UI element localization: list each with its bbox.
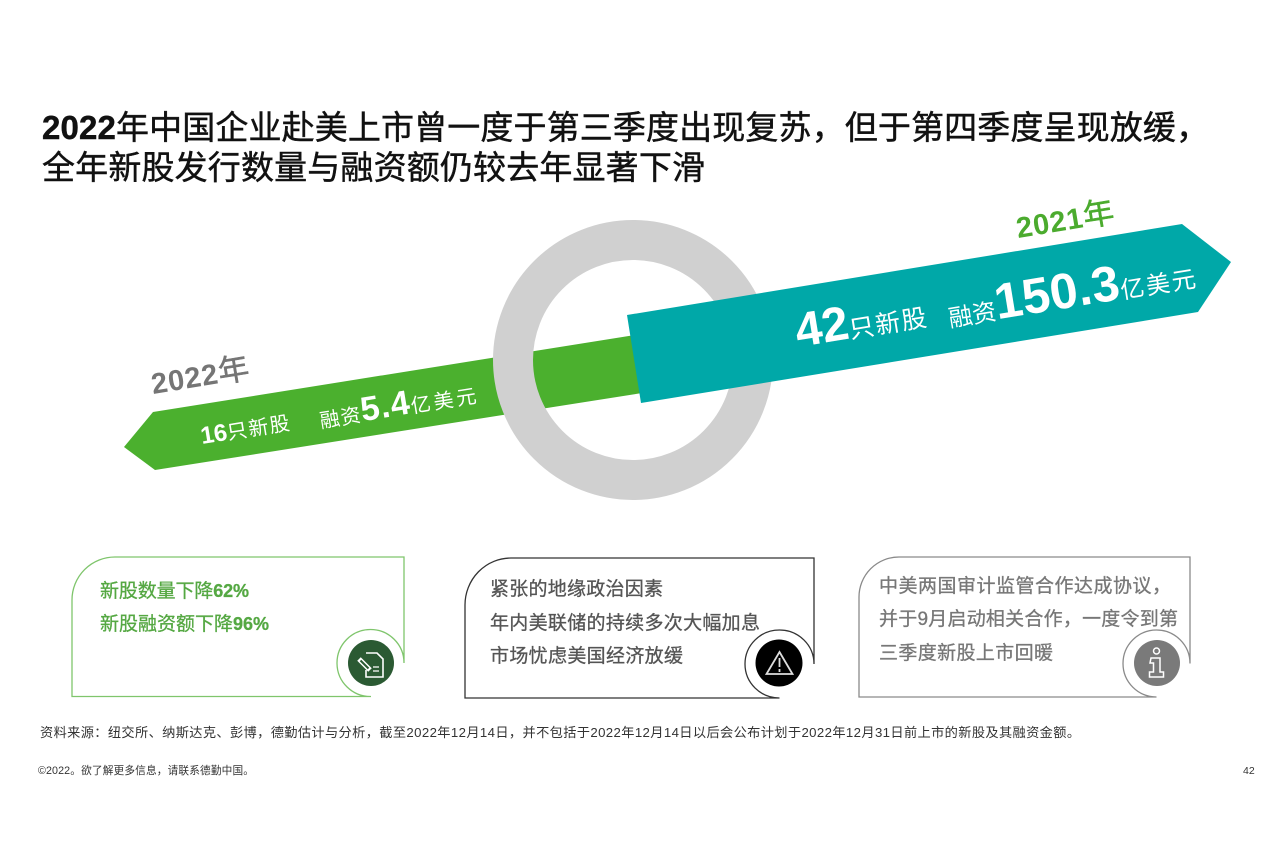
page number: 42 (1243, 765, 1255, 777)
panel outline (465, 558, 814, 698)
title: 全年新股发行数量与融资额仍较去年显著下滑 (42, 149, 705, 186)
stats: 2021 financing: 融资150.3亿美元 (943, 242, 1201, 338)
panel text: 市场忧虑美国经济放缓 (490, 645, 683, 667)
panel text (100, 580, 269, 635)
title: 2022年中国企业赴美上市曾一度于第三季度出现复苏，但于第四季度呈现放缓， (42, 109, 1209, 146)
panel: audit agreement (859, 557, 1190, 697)
stats: 2021 new listings: 42只新股 (791, 284, 931, 358)
label: 2022: 2022年 (148, 350, 252, 401)
panel text: 紧张的地缘政治因素 (490, 578, 663, 600)
stats: 2022 financing: 融资5.4亿美元 (316, 372, 481, 436)
icon: document and pencil (348, 640, 394, 686)
panel text: 三季度新股上市回暖 (879, 642, 1053, 664)
panel outline (72, 557, 404, 697)
copyright: ©2022。欲了解更多信息，请联系德勤中国。 (38, 764, 254, 777)
source note: 资料来源：纽交所、纳斯达克、彭博，德勤估计与分析，截至2022年12月14日，并不包括于2022年12月14日以后会公布计划于2022年12月31日前上市的新股及其融资金额。 (40, 724, 1080, 740)
arrow: 2021 teal (627, 224, 1231, 403)
panel text: 中美两国审计监管合作达成协议， (879, 575, 1171, 597)
panel text: 并于9月启动相关合作，一度令到第 (879, 608, 1178, 630)
ring (513, 240, 753, 480)
panel text: 年内美联储的持续多次大幅加息 (490, 612, 760, 634)
arrow: 2022 green (124, 335, 642, 470)
icon: information (1134, 640, 1180, 686)
panel text: 新股融资额下降96% (100, 613, 269, 635)
icon: warning triangle (756, 640, 802, 686)
panel text: 新股数量下降62% (100, 580, 249, 602)
panel: causes (465, 558, 814, 698)
panel: decline (72, 557, 404, 697)
stats: 2022 new listings: 16只新股 (199, 409, 293, 450)
panel outline (859, 557, 1190, 697)
label: 2021: 2021年 (1013, 194, 1117, 245)
panel text (879, 575, 1178, 664)
panel text (490, 578, 760, 667)
title (42, 109, 1209, 186)
